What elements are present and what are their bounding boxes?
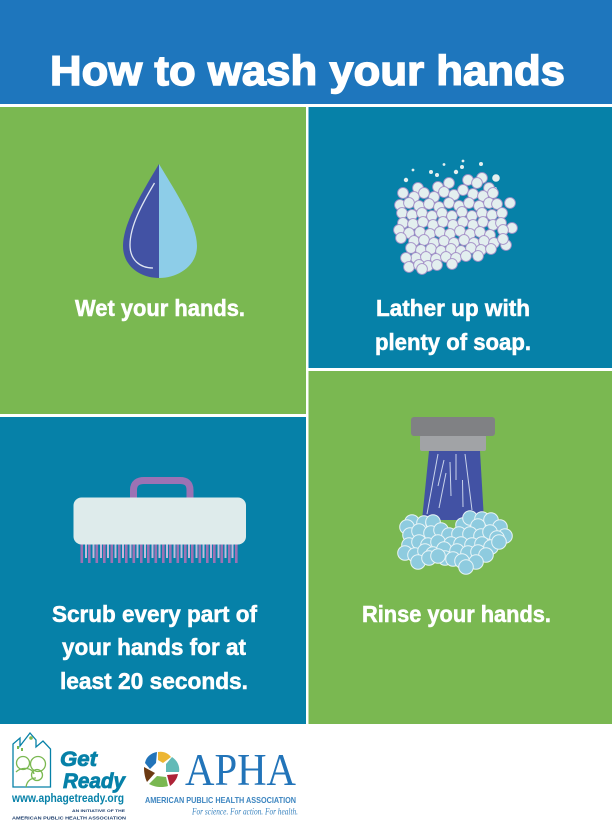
title banner: How to wash your hands [50, 47, 565, 94]
text: Get Ready: Get [60, 748, 98, 771]
panel: rinse [308, 371, 612, 724]
text: lather up: plenty of soap. [375, 329, 531, 355]
icon: scrub brush [74, 480, 246, 563]
panel: scrub [0, 417, 306, 724]
text: scrub: Scrub every part of [52, 601, 257, 627]
text: rinse: Rinse your hands. [362, 601, 551, 627]
text: association name: AMERICAN PUBLIC HEALTH ASSOCIATION [145, 795, 296, 805]
icon: water drop [123, 164, 197, 278]
text: scrub: your hands for at [62, 634, 246, 660]
text: website: www.aphagetready.org [11, 793, 124, 805]
text: scrub: least 20 seconds. [60, 668, 248, 694]
text: initiative credit: AMERICAN PUBLIC HEALTH ASSOCIATION [12, 816, 127, 822]
text: wet your hands: Wet your hands. [75, 295, 245, 321]
icon: faucet with running water and bubbles [398, 417, 512, 574]
icon: soap lather [394, 160, 517, 274]
text: Get Ready: Ready [63, 770, 126, 793]
text: tagline: For science. For action. For health. [191, 806, 298, 816]
title banner [0, 0, 612, 104]
text: lather up: Lather up with [376, 295, 530, 321]
text: initiative credit: AN INITIATIVE OF THE [72, 809, 126, 813]
text: Get Ready [60, 748, 126, 793]
panel: wet your hands [0, 107, 306, 414]
logo: Get Ready [11, 733, 127, 822]
icon: APHA wheel [144, 752, 179, 787]
panel: lather up [308, 107, 612, 368]
text: scrub [52, 601, 257, 694]
text: lather up [375, 295, 531, 355]
text: initiative credit [12, 809, 127, 822]
logo: APHA [144, 745, 298, 816]
icon: house with circles [13, 733, 50, 787]
text: APHA: APHA [185, 745, 296, 795]
